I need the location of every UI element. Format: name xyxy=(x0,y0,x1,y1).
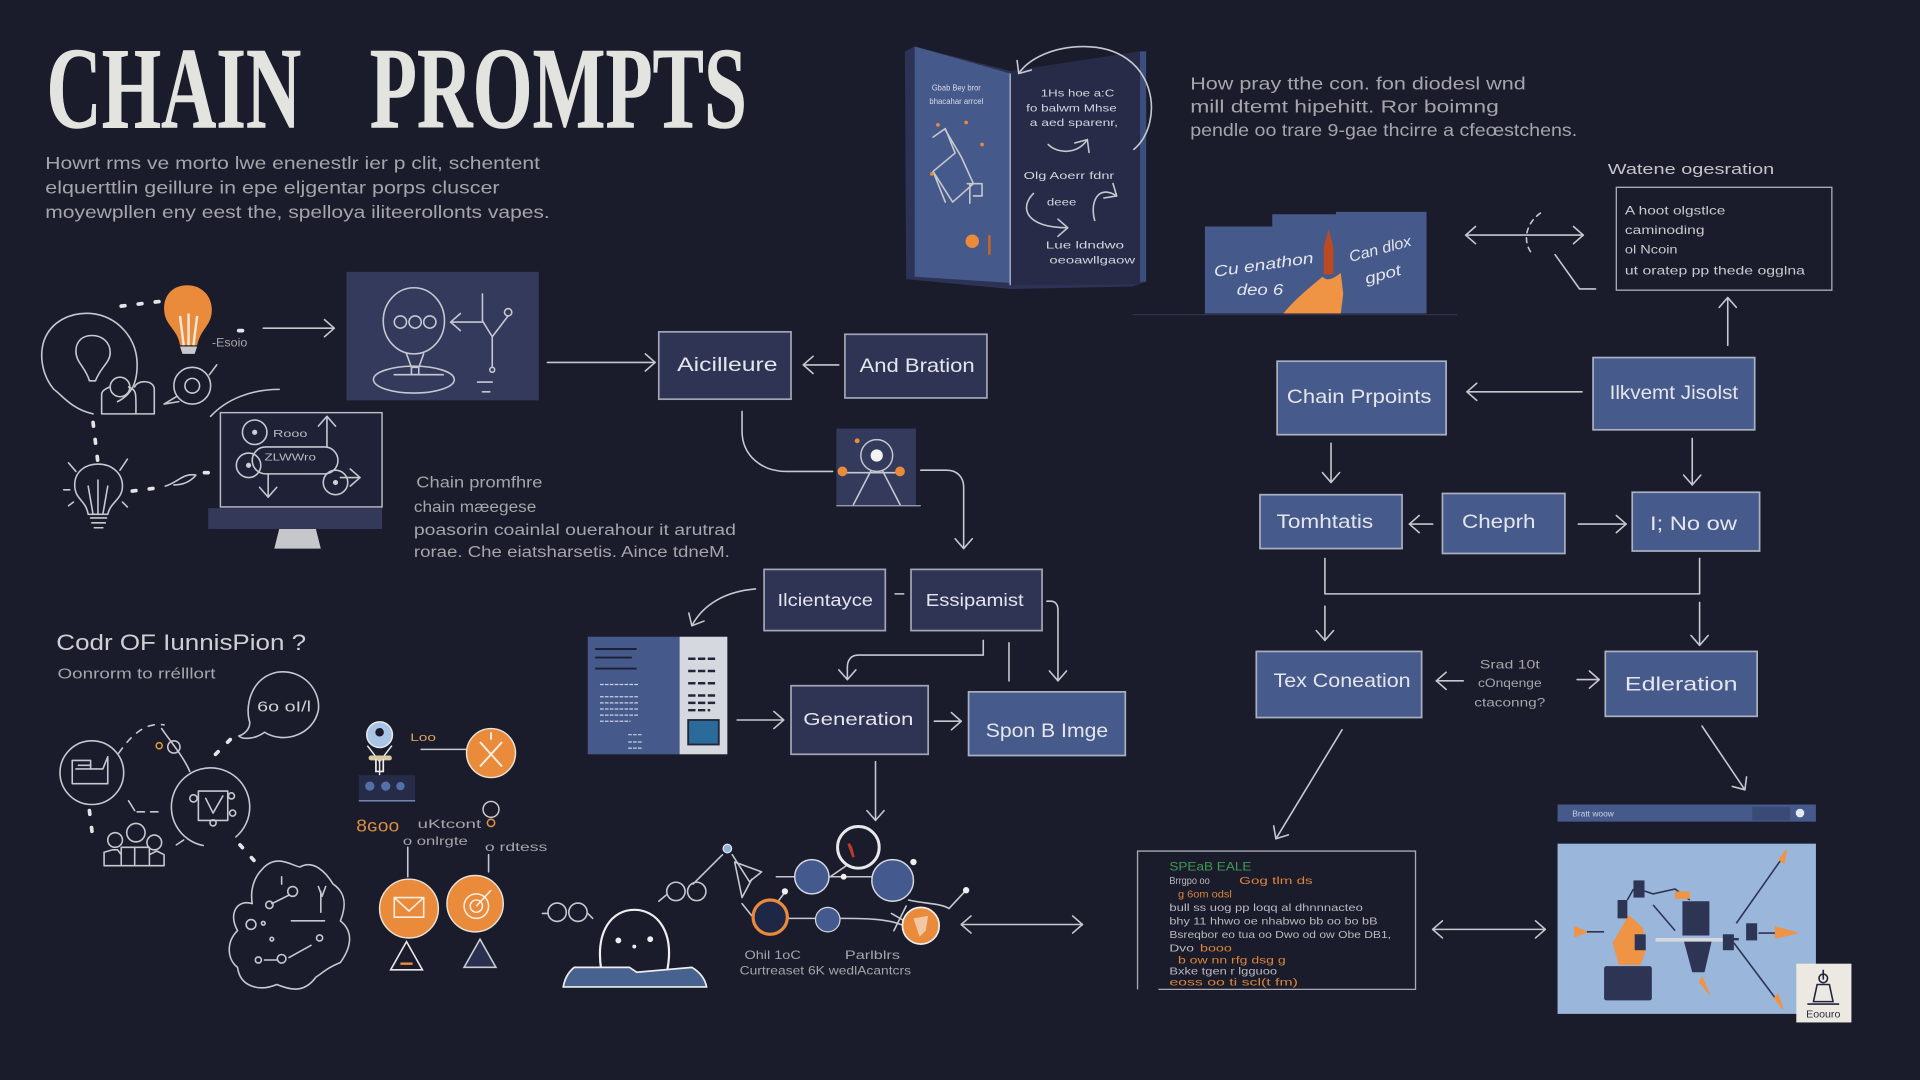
curve to network icon xyxy=(742,411,833,471)
box: And Bration xyxy=(845,334,987,398)
icon: orange mail xyxy=(380,879,438,938)
double arrow: code to image xyxy=(1433,928,1545,930)
double arrow: network to code xyxy=(961,923,1082,925)
center paragraph: Chain promfhre xyxy=(416,474,543,491)
book right page text: a aed sparenr, xyxy=(1030,118,1118,129)
dotted arrow to panel xyxy=(239,328,334,331)
small labels: uKtcont xyxy=(418,817,482,831)
dashed links xyxy=(89,724,262,869)
small labels: o onlrgte xyxy=(403,834,468,848)
document thumbnail xyxy=(588,637,727,754)
code lines: bull ss uog pp loqq al dhnnnacteo xyxy=(1169,903,1364,914)
arrow up to text box xyxy=(1727,298,1729,345)
connector line xyxy=(1008,643,1010,681)
book right page text: oeoawllgaow xyxy=(1049,255,1137,266)
code lines xyxy=(1169,876,1391,989)
monitor: ZLWWro xyxy=(264,452,317,463)
box: Span B Imge xyxy=(969,692,1125,756)
book right page text xyxy=(1024,89,1137,266)
box: And Bration: And Bration xyxy=(860,356,975,377)
panel: text box: caminoding xyxy=(1625,223,1705,237)
small labels: 8ɢoo xyxy=(356,815,399,835)
icon: orange bulb: -Esoio xyxy=(212,336,248,350)
code lines: booo xyxy=(1200,943,1233,954)
folder text: Can dlox xyxy=(1347,233,1415,266)
intro paragraph: moyewpllen eny eest the, spelloya iliteerollonts vapes. xyxy=(45,202,550,222)
box: Essipamist: Essipamist xyxy=(926,590,1024,610)
icon: pin xyxy=(367,722,392,784)
connector to tool icon xyxy=(421,748,467,750)
book left page text: bhacahar arrcel xyxy=(929,96,983,106)
center paragraph: rorae. Che eiatsharsetis. Aince tdneM. xyxy=(414,544,730,561)
code lines: eoss oo ti scl(t fm) xyxy=(1169,978,1298,989)
header bar: Bratt woow xyxy=(1572,809,1615,819)
icon: warning triangles xyxy=(391,939,496,970)
box: Cheprh xyxy=(1442,493,1565,553)
title: CHAIN xyxy=(47,24,301,153)
arrow: And Bration to Aicilleure xyxy=(803,364,839,366)
box: Ilcientayce: Ilcientayce xyxy=(778,590,873,610)
arrow to Is Now xyxy=(1578,523,1626,525)
right intro paragraph: How pray tthe con. fon diodesl wnd xyxy=(1190,73,1526,93)
question with arrows: Srad 10t xyxy=(1480,658,1541,672)
icon: orange target xyxy=(447,876,503,932)
arrow: Essipamist to Span xyxy=(1047,601,1058,681)
network links xyxy=(693,855,965,931)
heading: lower left: Oonrorm to rrélllort xyxy=(58,666,216,682)
book xyxy=(905,47,1151,289)
box: Is Now xyxy=(1632,492,1760,551)
box: Ilkvemt Jisolst: Ilkvemt Jisolst xyxy=(1610,383,1739,404)
question with arrows xyxy=(1436,658,1599,710)
header bar xyxy=(1558,804,1816,822)
dotted link to bulb xyxy=(121,301,162,306)
arrow: Essipamist to Generation xyxy=(847,640,983,680)
glasses lower xyxy=(542,903,593,921)
reader figure xyxy=(563,910,707,987)
box: Span B Imge: Spon B Imge xyxy=(986,721,1108,742)
network labels xyxy=(740,948,911,978)
question with arrows: cOnqenge xyxy=(1478,676,1542,690)
folder text: Cu enathon xyxy=(1213,250,1315,281)
label: Loo: Loo xyxy=(410,732,436,744)
stems xyxy=(408,847,489,877)
box: Tomhtatis: Tomhtatis xyxy=(1277,512,1373,533)
network nodes xyxy=(723,844,732,853)
box: Edleration xyxy=(1605,651,1757,716)
intro paragraph xyxy=(45,153,550,222)
panel: text box: ut oratep pp thede ogglna xyxy=(1625,263,1805,277)
arrow: icon to Essipamist xyxy=(921,470,964,549)
book right page text: fo balwm Mhse xyxy=(1026,103,1117,114)
box: Aicilleure xyxy=(659,332,791,399)
arc above monitor xyxy=(211,389,279,416)
icon: check circle xyxy=(171,768,250,846)
concept map xyxy=(60,672,350,989)
icon: orange tools xyxy=(467,729,516,778)
icon: people xyxy=(104,823,164,866)
icon: folder circle xyxy=(60,741,124,804)
image panel: robot diagram xyxy=(1558,844,1816,1014)
icon: speech bubble xyxy=(239,672,319,738)
red pencil xyxy=(1324,229,1333,274)
box: Aicilleure: Aicilleure xyxy=(677,355,778,376)
icon: target speech bubble xyxy=(164,365,217,404)
panel: text box xyxy=(1608,162,1832,290)
code panel xyxy=(1138,851,1416,989)
right intro paragraph: pendle oo trare 9-gae thcirre a cfeœstchens. xyxy=(1190,120,1577,140)
icon: orange bulb xyxy=(164,285,248,354)
box: Text Generation: Tex Coneation xyxy=(1273,671,1411,692)
box: Cheprh: Cheprh xyxy=(1462,512,1536,533)
icon: speech bubble: 6o oI/l xyxy=(257,699,311,715)
box: Edleration: Edleration xyxy=(1625,675,1738,696)
small labels xyxy=(356,801,547,854)
badge: Eoouro xyxy=(1806,1010,1841,1021)
title: PROMPTS xyxy=(370,24,747,153)
connector dash xyxy=(895,593,904,595)
box: Tomhtatis xyxy=(1260,495,1402,549)
arrows down xyxy=(1331,438,1692,485)
arrows to outputs xyxy=(1276,726,1745,839)
book left page text: Gbab Bey bror xyxy=(932,83,981,93)
book arrows xyxy=(1019,47,1151,228)
arrow to Tomhtatis xyxy=(1409,523,1433,525)
folder text: gpot xyxy=(1363,262,1404,288)
heading: lower left: Codr OF IunnisPion ? xyxy=(56,630,306,655)
small labels: o rdtess xyxy=(485,840,547,854)
code lines: Brrgpo oo xyxy=(1169,876,1210,887)
arrow: Generation down to network xyxy=(875,762,877,820)
box: Generation: Generation xyxy=(803,709,913,729)
intro paragraph: Howrt rms ve morto lwe enenestlr ier p clit, schentent xyxy=(45,153,540,173)
arrow to Chain Prpoints xyxy=(1467,391,1582,393)
bracket connector xyxy=(1325,558,1700,594)
folder with hand xyxy=(1133,212,1457,315)
box: Generation xyxy=(791,686,928,754)
arrow: panel to Aicilleure xyxy=(547,361,655,363)
robot parts xyxy=(1613,915,1646,965)
heading: lower left xyxy=(56,630,306,682)
curved arrow to document xyxy=(692,589,756,626)
arrow: Generation to Span xyxy=(934,720,961,722)
title xyxy=(47,24,747,153)
icon: head outline xyxy=(42,313,154,414)
book left page text xyxy=(929,83,983,106)
illustration: ideas and head xyxy=(42,285,382,549)
monitor xyxy=(208,413,382,549)
center paragraph: chain mæegese xyxy=(414,499,536,516)
box: Ilcientayce xyxy=(764,569,885,631)
network labels: Curtreaset 6K wedlAcantcrs xyxy=(740,964,911,978)
center paragraph: poasorin coainlal ouerahour it arutrad xyxy=(414,522,736,539)
folder text: deo 6 xyxy=(1237,282,1284,299)
code lines: b ow nn rfg dsg g xyxy=(1178,956,1286,967)
right intro paragraph xyxy=(1190,73,1577,140)
code lines: Gog tlm ds xyxy=(1239,876,1313,887)
icon: outline bulb xyxy=(64,459,127,528)
panel: text box: Watene ogesration xyxy=(1608,162,1774,178)
dotted link to monitor xyxy=(132,473,208,491)
arrows down to generation row xyxy=(1325,602,1700,645)
code panel: SPEaB EALE xyxy=(1169,861,1252,874)
icon panel: node figure xyxy=(836,429,921,506)
icon: cloud of ideas xyxy=(229,861,350,989)
book right page text: Olg Aoerr fdnr xyxy=(1024,171,1115,182)
monitor: Rooo xyxy=(273,429,308,440)
network labels: Parlblrs xyxy=(845,948,900,962)
center paragraph xyxy=(414,474,736,561)
box: Is Now: I; No ow xyxy=(1650,514,1737,535)
panel: text box: A hoot olgstlce xyxy=(1625,203,1726,217)
network diagram xyxy=(693,827,969,978)
book right page text: 1Hs hoe a:C xyxy=(1041,89,1114,100)
code lines: Dvo xyxy=(1169,943,1195,954)
arrow: document to Generation xyxy=(737,719,784,721)
code lines: bhy 11 hhwo oe nhabwo bb oo bo bB xyxy=(1169,916,1378,927)
box: Essipamist xyxy=(911,569,1042,631)
intro paragraph: elquerttlin geillure in epe eljgentar porps cluscer xyxy=(45,177,500,197)
code lines: Bxke tgen r lgguoo xyxy=(1169,967,1278,978)
code lines: Bsreqbor eo tua oo Dwo od ow Obe DB1, xyxy=(1169,930,1391,941)
monitor diagram xyxy=(236,416,360,497)
box: Ilkvemt Jisolst xyxy=(1593,358,1755,430)
double arrow with dashes xyxy=(1466,213,1596,289)
glasses upper xyxy=(659,882,706,901)
box: Text Generation xyxy=(1256,651,1422,718)
book right page text: deee xyxy=(1047,198,1076,209)
question with arrows: ctaconng? xyxy=(1474,696,1546,710)
badge xyxy=(1796,964,1851,1022)
network labels: Ohil 1oC xyxy=(744,948,801,962)
box: Chain Prpoints xyxy=(1277,361,1446,435)
right intro paragraph: mill dtemt hipehitt. Ror boimng xyxy=(1190,97,1499,117)
folder text xyxy=(1213,233,1415,299)
small dot panel xyxy=(359,775,415,801)
book right page text: Lue ldndwo xyxy=(1046,241,1125,252)
orange hand xyxy=(1283,273,1343,313)
panel: text box: ol Ncoin xyxy=(1625,242,1678,256)
box: Chain Prpoints: Chain Prpoints xyxy=(1287,387,1431,408)
code lines: g 6om odsl xyxy=(1178,890,1232,901)
panel: bulb diagram xyxy=(347,272,539,400)
dotted link to lower bulb xyxy=(93,422,98,463)
book left page diagram xyxy=(933,129,982,203)
